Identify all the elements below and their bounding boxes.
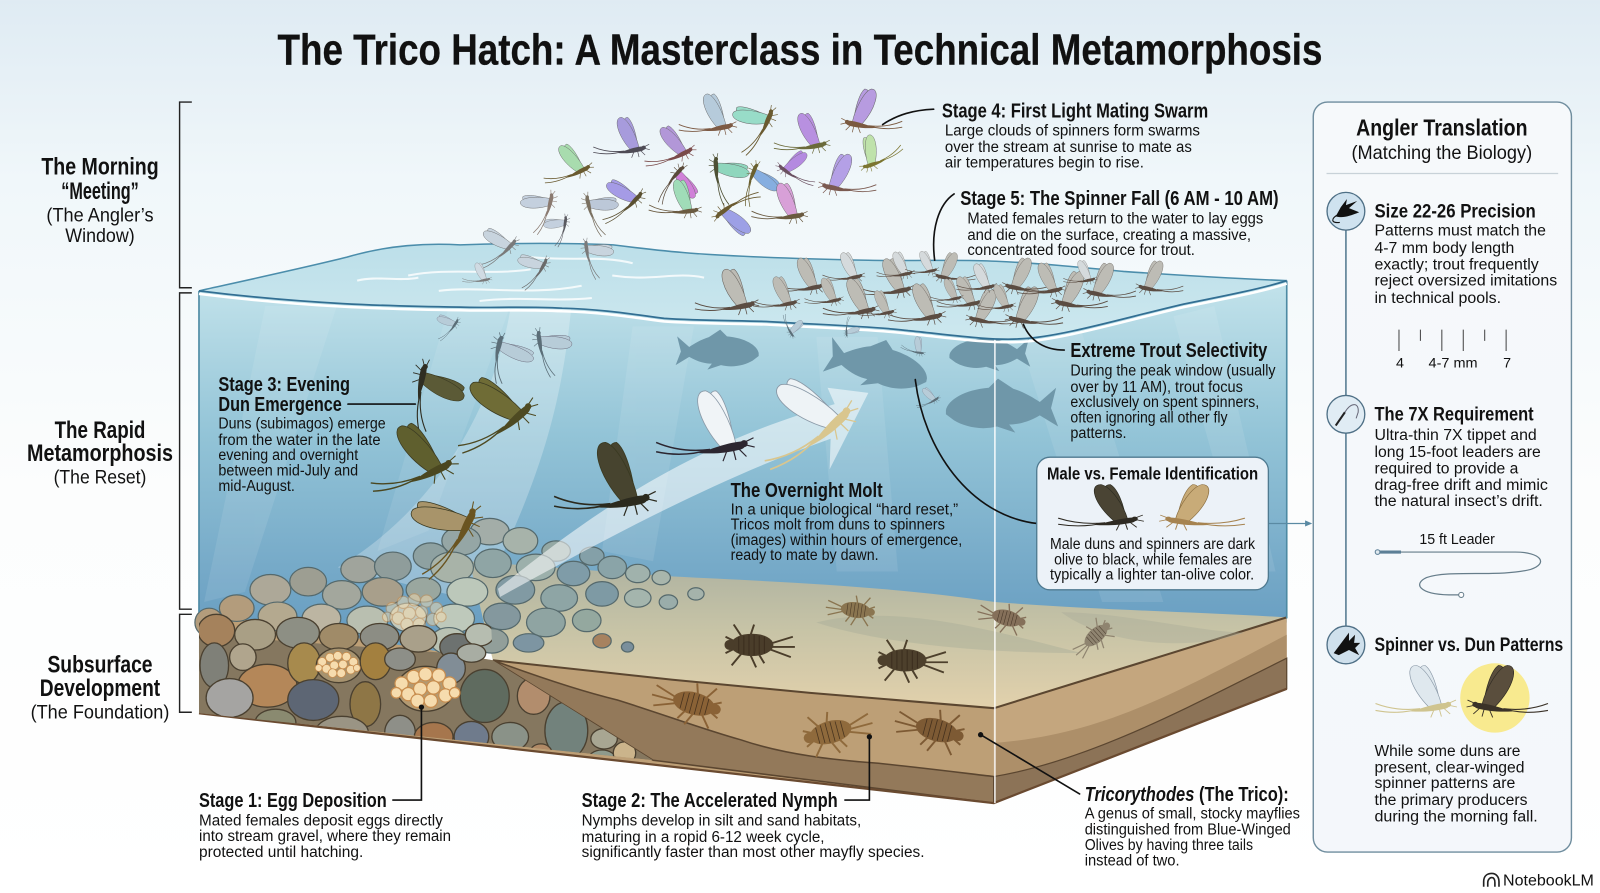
callout: extreme trout selectivity: During the peak window (usually <box>1070 363 1276 380</box>
label group: The Morning Meeting: Window) <box>65 225 135 247</box>
trout silhouettes <box>676 328 1058 433</box>
section: size 22-26: reject oversized imitations <box>1374 273 1557 290</box>
callout: stage 5 <box>934 188 1279 260</box>
callout: stage 5: Stage 5: The Spinner Fall (6 AM - 10 AM) <box>960 188 1279 210</box>
section: 7X requirement: drag-free drift and mimic <box>1374 477 1548 494</box>
icon: male dun <box>1058 484 1144 530</box>
callout: stage 3 <box>218 374 415 495</box>
corner edges <box>994 337 996 803</box>
icon: spinner tuft <box>1327 626 1365 664</box>
stream cross-section block <box>195 243 1287 803</box>
callout: stage 4: Stage 4: First Light Mating Swarm <box>942 100 1208 122</box>
panel: male vs female identification: typically a lighter tan-olive color. <box>1050 567 1254 584</box>
callout: stage 4: over the stream at sunrise to mate as <box>945 139 1192 156</box>
callout: stage 3: from the water in the late <box>218 432 381 449</box>
section body: spinner patterns are <box>1374 775 1516 792</box>
emerging duns <box>359 356 866 585</box>
section: size 22-26: 4-7 mm body length <box>1374 240 1514 257</box>
callout: stage 5: and die on the surface, creating a massive, <box>967 227 1251 244</box>
light rays <box>204 306 1276 602</box>
callout: the overnight molt: ready to mate by dawn. <box>731 547 879 564</box>
section: size 22-26: Patterns must match the <box>1374 223 1546 240</box>
callout line to identification box <box>915 380 1037 523</box>
callout: extreme trout selectivity: Extreme Trout Selectivity <box>1070 340 1268 362</box>
callout: stage 3: Stage 3: Evening <box>218 374 350 396</box>
rising and spent flies under water <box>427 307 942 410</box>
section: 7X requirement: required to provide a <box>1374 460 1519 477</box>
panel: male vs female identification: Male duns and spinners are dark <box>1050 536 1255 553</box>
section: 7X requirement: the natural insect’s drift. <box>1374 493 1543 510</box>
panel: male vs female identification: Male vs. Female Identification <box>1047 464 1258 484</box>
panel: male vs female identification: olive to black, while females are <box>1054 551 1252 568</box>
migration arrow <box>498 388 868 597</box>
label group: The Rapid Metamorphosis: (The Reset) <box>54 467 146 489</box>
egg cluster on gravel <box>382 594 446 630</box>
callout: stage 2: maturing in a ropid 6-12 week cycle, <box>582 829 824 846</box>
callout: the overnight molt: The Overnight Molt <box>731 480 883 502</box>
callout: the overnight molt <box>731 480 962 564</box>
callout: stage 4 <box>883 100 1208 171</box>
spinner fall on surface <box>695 251 1183 328</box>
gravel pile <box>195 518 704 654</box>
section: size 22-26 <box>1374 200 1557 307</box>
callout: stage 3: Duns (subimagos) emerge <box>218 416 386 433</box>
callout: stage 3: Dun Emergence <box>218 394 342 416</box>
callout: stage 4: Large clouds of spinners form swarms <box>945 123 1200 140</box>
callout: the overnight molt: In a unique biological “hard reset,” <box>731 501 958 518</box>
leader diagram <box>1375 532 1541 597</box>
callout: stage 1: protected until hatching. <box>199 844 363 861</box>
callout: stage 2: Stage 2: The Accelerated Nymph <box>582 790 838 812</box>
label group: The Rapid Metamorphosis <box>27 293 192 609</box>
callout: extreme trout selectivity: exclusively on spent spinners, <box>1070 394 1259 411</box>
section body: While some duns are <box>1374 743 1521 760</box>
label group: The Rapid Metamorphosis: The Rapid <box>55 417 145 444</box>
water column <box>199 281 1287 653</box>
icon: tippet line <box>1327 395 1365 433</box>
section: size 22-26: exactly; trout frequently <box>1374 256 1539 273</box>
panel: angler translation: Angler Translation <box>1356 115 1528 141</box>
callout: Tricorythodes: distinguished from Blue-Winged <box>1085 822 1291 839</box>
label group: The Morning Meeting: The Morning <box>41 154 159 181</box>
callout: stage 1: into stream gravel, where they remain <box>199 828 451 845</box>
sand streambed <box>469 561 1287 708</box>
label group: The Morning Meeting: (The Angler’s <box>46 204 154 226</box>
water surface <box>199 243 1287 342</box>
size ruler <box>1396 330 1511 371</box>
section: 7X requirement: The 7X Requirement <box>1374 403 1534 425</box>
panel: angler translation: (Matching the Biology) <box>1352 142 1532 164</box>
section body <box>1374 743 1538 825</box>
callout: stage 2: significantly faster than most other mayfly species. <box>582 844 924 861</box>
nymphs on sand <box>724 592 1119 683</box>
section: size 22-26: in technical pools. <box>1374 290 1501 307</box>
icon: clear-winged spinner <box>1376 665 1457 717</box>
arrow to angler panel <box>1268 520 1312 527</box>
label group: The Morning Meeting: “Meeting” <box>61 178 139 205</box>
section: 7X requirement: long 15-foot leaders are <box>1374 444 1541 461</box>
subsurface gravel <box>198 614 653 770</box>
section body: during the morning fall. <box>1374 808 1538 825</box>
size ruler: 4-7 mm <box>1429 355 1478 371</box>
section: 7X requirement: Ultra-thin 7X tippet and <box>1374 427 1537 444</box>
callout: Tricorythodes: instead of two. <box>1085 852 1180 869</box>
title: The Trico Hatch: A Masterclass in Technical Metamorphosis <box>278 25 1322 74</box>
callout: stage 5: concentrated food source for trout. <box>967 242 1195 259</box>
label group: The Morning Meeting <box>41 102 192 288</box>
label group: Subsurface Development: (The Foundation) <box>31 701 169 723</box>
icon: dark dun <box>1467 665 1548 717</box>
size ruler: 7 <box>1503 355 1511 371</box>
nymphs in soil <box>647 673 969 761</box>
arrow: rising emergence band <box>338 306 571 602</box>
callout: extreme trout selectivity: patterns. <box>1070 425 1127 442</box>
callout: Tricorythodes: Olives by having three tails <box>1085 837 1253 854</box>
callout: Tricorythodes: Tricorythodes (The Trico): <box>1085 784 1289 806</box>
callout: stage 3: evening and overnight <box>218 447 359 464</box>
callout: stage 5: Mated females return to the water to lay eggs <box>967 210 1263 227</box>
panel: male vs female identification <box>1037 457 1268 590</box>
label group: Subsurface Development <box>31 614 192 723</box>
label group: Subsurface Development: Subsurface <box>47 651 153 678</box>
icon: highlight circle <box>1460 663 1530 733</box>
callout: extreme trout selectivity: often ignoring all other fly <box>1070 409 1228 426</box>
section: 7X requirement <box>1374 403 1548 510</box>
label group: Subsurface Development: Development <box>40 675 160 702</box>
callout: stage 1: Mated females deposit eggs directly <box>199 813 443 830</box>
egg clusters in gravel <box>315 651 460 707</box>
callout: extreme trout selectivity <box>1023 325 1276 442</box>
callout: stage 2: Nymphs develop in silt and sand habitats, <box>582 813 861 830</box>
callout: stage 3: mid-August. <box>218 478 295 495</box>
section body: the primary producers <box>1374 792 1528 809</box>
callout: the overnight molt: (images) within hours of emergence, <box>731 532 962 549</box>
callout: stage 1: Stage 1: Egg Deposition <box>199 790 387 812</box>
callout: stage 4: air temperatures begin to rise. <box>945 154 1144 171</box>
section body: present, clear-winged <box>1374 759 1524 776</box>
callout: Tricorythodes: A genus of small, stocky mayflies <box>1085 805 1300 822</box>
icon: fly hook <box>1327 192 1365 230</box>
panel: angler translation <box>1313 102 1571 852</box>
leader diagram: 15 ft Leader <box>1419 532 1495 548</box>
callout: extreme trout selectivity: over by 11 AM), trout focus <box>1070 379 1243 396</box>
section: size 22-26: Size 22-26 Precision <box>1374 200 1536 222</box>
swarm of spinners <box>462 89 905 293</box>
section: spinner vs dun: Spinner vs. Dun Patterns <box>1374 634 1563 656</box>
label group: The Rapid Metamorphosis: Metamorphosis <box>27 440 173 467</box>
size ruler: 4 <box>1396 355 1404 371</box>
callout: the overnight molt: Tricos molt from duns to spinners <box>731 517 945 534</box>
callout: stage 1 <box>199 705 451 861</box>
callout: stage 2 <box>582 734 924 861</box>
callout: Tricorythodes <box>978 732 1300 869</box>
logo: NotebookLM: NotebookLM <box>1503 873 1594 890</box>
callout: stage 3: between mid-July and <box>218 463 358 480</box>
icon: female dun <box>1159 484 1245 530</box>
soil cross-section <box>199 612 1287 803</box>
